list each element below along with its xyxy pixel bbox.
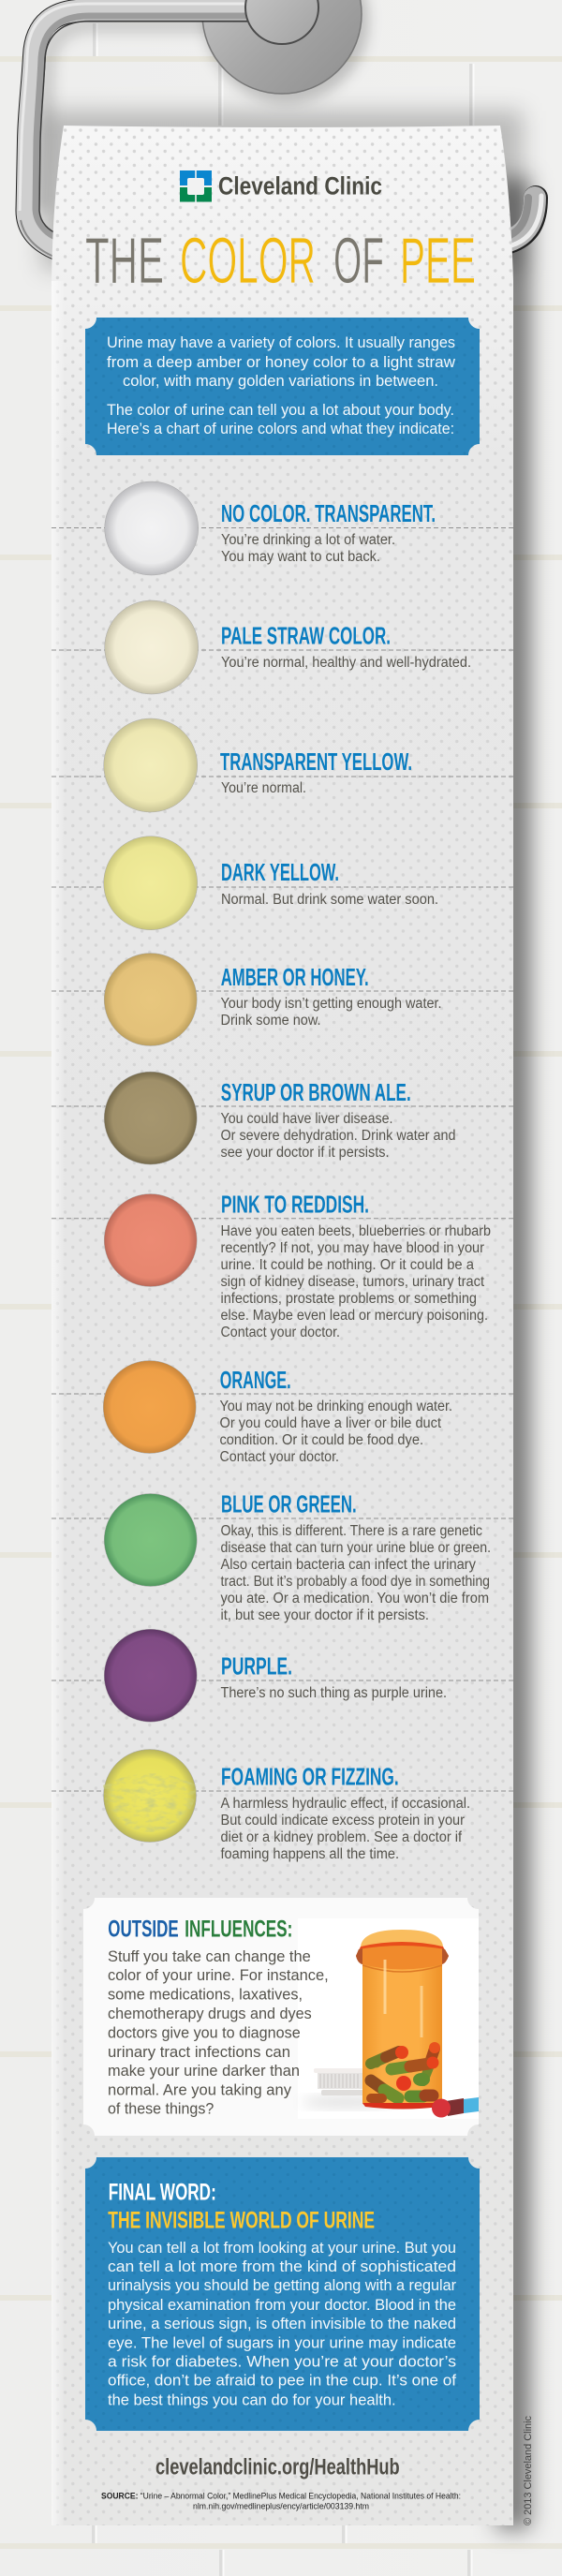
description: You could have liver disease. bbox=[221, 1111, 393, 1127]
swatch: purple bbox=[104, 1629, 197, 1722]
swatch: syrup bbox=[104, 1072, 197, 1164]
description bbox=[221, 1223, 491, 1340]
heading: FOAMING OR FIZZING. bbox=[221, 1762, 399, 1790]
swatch: foaming bbox=[103, 1750, 197, 1843]
row: no color bbox=[52, 481, 513, 575]
icon: logo cross bbox=[180, 170, 212, 202]
description: Your body isn’t getting enough water. bbox=[221, 996, 442, 1012]
body text: urinalysis you should be getting along with a regular bbox=[108, 2276, 456, 2294]
body text: urine, a serious sign, is often invisible to the naked bbox=[108, 2315, 456, 2332]
bracket bbox=[245, 0, 318, 44]
heading: PINK TO REDDISH. bbox=[221, 1191, 369, 1219]
bottle body bbox=[362, 1958, 442, 2106]
heading: PURPLE. bbox=[221, 1651, 292, 1680]
description: Have you eaten beets, blueberries or rhubarb bbox=[221, 1223, 491, 1239]
body text: normal. Are you taking any bbox=[108, 2081, 291, 2099]
heading: SYRUP OR BROWN ALE. bbox=[221, 1078, 411, 1106]
description: Also certain bacteria can infect the urinary bbox=[221, 1557, 476, 1573]
copyright: © 2013 Cleveland Clinic bbox=[523, 2416, 534, 2525]
pills in bottle bbox=[371, 2049, 435, 2098]
panel: outside influences bbox=[83, 1898, 479, 2136]
swatch: pale straw bbox=[105, 600, 199, 694]
row: blue or green bbox=[52, 1489, 513, 1623]
swatch: amber bbox=[104, 954, 197, 1045]
swatch: green bbox=[104, 1493, 197, 1587]
source bbox=[101, 2492, 461, 2512]
row: pale straw bbox=[52, 600, 513, 694]
body text: urinary tract infections can bbox=[108, 2043, 290, 2061]
description: Drink some now. bbox=[221, 1013, 320, 1029]
heading: INFLUENCES: bbox=[185, 1916, 292, 1942]
title: COLOR bbox=[180, 224, 316, 297]
body text: Stuff you take can change the bbox=[108, 1947, 311, 1965]
swatch: no color bbox=[105, 481, 199, 575]
heading: ORANGE. bbox=[220, 1366, 291, 1394]
row: dark yellow bbox=[52, 836, 513, 930]
wall plate bbox=[202, 0, 362, 94]
heading: DARK YELLOW. bbox=[221, 858, 339, 886]
body text: a risk for diabetes. When you’re at your doctor’s bbox=[108, 2353, 456, 2371]
bottle lid bbox=[314, 2068, 364, 2095]
intro text: Urine may have a variety of colors. It usually ranges bbox=[107, 333, 455, 351]
body text: color of your urine. For instance, bbox=[108, 1966, 329, 1984]
description: tract. But it’s probably a food dye in something bbox=[221, 1574, 490, 1590]
row: pink bbox=[52, 1191, 513, 1340]
subheading: THE INVISIBLE WORLD OF URINE bbox=[108, 2207, 375, 2233]
description: condition. Or it could be food dye. bbox=[219, 1432, 423, 1448]
row: amber bbox=[52, 954, 513, 1045]
swatch: orange bbox=[103, 1360, 196, 1454]
title: PEE bbox=[400, 224, 476, 297]
description: you ate. Or a medication. You won’t die from bbox=[221, 1591, 489, 1606]
description: Or severe dehydration. Drink water and bbox=[221, 1128, 455, 1144]
description: There’s no such thing as purple urine. bbox=[221, 1685, 447, 1701]
title bbox=[85, 224, 476, 297]
description: A harmless hydraulic effect, if occasional. bbox=[221, 1796, 470, 1812]
description: You’re normal. bbox=[221, 780, 306, 796]
body text bbox=[108, 2239, 456, 2409]
description: disease that can turn your urine blue or green. bbox=[221, 1540, 491, 1556]
description: You may want to cut back. bbox=[221, 549, 380, 565]
row: orange bbox=[52, 1360, 513, 1465]
description: diet or a kidney problem. See a doctor if bbox=[221, 1829, 463, 1845]
source: SOURCE: “Urine – Abnormal Color,” MedlinePlus Medical Encyclopedia, National Institutes of Health: bbox=[101, 2492, 461, 2502]
description: You’re normal, healthy and well-hydrated. bbox=[221, 655, 471, 671]
heading: NO COLOR. TRANSPARENT. bbox=[221, 499, 436, 527]
body text: can tell a lot more from the kind of sophisticated bbox=[108, 2258, 456, 2275]
swatch: dark yellow bbox=[104, 836, 198, 930]
heading: AMBER OR HONEY. bbox=[221, 963, 369, 991]
heading: TRANSPARENT YELLOW. bbox=[220, 748, 412, 776]
toilet paper holder bbox=[20, 0, 541, 259]
description bbox=[221, 996, 442, 1029]
panel: intro bbox=[85, 318, 480, 455]
description: else. Maybe even lead or mercury poisoning. bbox=[221, 1308, 488, 1324]
body text: office, don’t be afraid to pee in the cup. It’s one of bbox=[108, 2372, 456, 2390]
bottle cap bbox=[356, 1930, 449, 1972]
row: syrup bbox=[52, 1072, 513, 1164]
intro text bbox=[107, 333, 456, 437]
title: OF bbox=[333, 224, 384, 297]
intro text: color, with many golden variations in between. bbox=[123, 372, 438, 390]
description: Contact your doctor. bbox=[219, 1449, 339, 1465]
row: foaming bbox=[52, 1750, 513, 1862]
body text: doctors give you to diagnose bbox=[108, 2024, 301, 2042]
loose capsule bbox=[432, 2097, 479, 2117]
intro text: Here’s a chart of urine colors and what they indicate: bbox=[107, 420, 454, 437]
toilet paper sheet bbox=[52, 126, 513, 2525]
description: sign of kidney disease, tumors, urinary tract bbox=[221, 1274, 485, 1290]
description bbox=[219, 1399, 452, 1465]
description: You’re drinking a lot of water. bbox=[221, 532, 395, 548]
description: But could indicate excess protein in your bbox=[221, 1813, 465, 1828]
description bbox=[221, 1111, 455, 1161]
swatch: pink bbox=[104, 1193, 197, 1287]
description: foaming happens all the time. bbox=[221, 1846, 399, 1862]
source: nlm.nih.gov/medlineplus/ency/article/003139.htm bbox=[193, 2502, 369, 2512]
body text: make your urine darker than bbox=[108, 2062, 300, 2080]
body text: of these things? bbox=[108, 2100, 214, 2118]
hook bbox=[506, 196, 541, 245]
heading: final word: FINAL WORD: bbox=[109, 2179, 216, 2205]
body text: physical examination from your doctor. Blood in the bbox=[108, 2296, 456, 2314]
row: transparent yellow bbox=[52, 718, 513, 812]
towel bar bbox=[20, 4, 248, 259]
panel: final word bbox=[85, 2157, 480, 2431]
description bbox=[221, 1796, 470, 1862]
image: pill bottle bbox=[302, 1930, 479, 2117]
url: clevelandclinic.org/HealthHub bbox=[155, 2455, 400, 2480]
body text: eye. The level of sugars in your urine may indicate bbox=[108, 2334, 456, 2352]
description bbox=[221, 532, 395, 565]
body text: the best things you can do for your health. bbox=[108, 2391, 396, 2409]
body text bbox=[108, 1947, 329, 2118]
description: Or you could have a liver or bile duct bbox=[219, 1415, 442, 1431]
intro text: from a deep amber or honey color to a light straw bbox=[107, 353, 456, 371]
description: urine. It could be nothing. Or it could be a bbox=[221, 1257, 474, 1273]
body text: chemotherapy drugs and dyes bbox=[108, 2005, 312, 2022]
description: Okay, this is different. There is a rare genetic bbox=[221, 1523, 482, 1539]
heading bbox=[108, 1916, 292, 1942]
logo: Cleveland Clinic bbox=[180, 170, 382, 202]
body text: some medications, laxatives, bbox=[108, 1986, 303, 2004]
description: Normal. But drink some water soon. bbox=[221, 892, 438, 908]
description: see your doctor if it persists. bbox=[221, 1145, 390, 1161]
logo wordmark: Cleveland Clinic bbox=[218, 172, 382, 200]
description: Contact your doctor. bbox=[221, 1325, 340, 1340]
body text: You can tell a lot from looking at your urine. But you bbox=[108, 2239, 456, 2257]
heading: PALE STRAW COLOR. bbox=[221, 622, 391, 650]
description: infections, prostate problems or something bbox=[221, 1291, 477, 1307]
row: purple bbox=[52, 1629, 513, 1722]
description: You may not be drinking enough water. bbox=[219, 1399, 452, 1414]
description: it, but see your doctor if it persists. bbox=[221, 1607, 429, 1623]
heading: OUTSIDE bbox=[108, 1916, 179, 1942]
intro text: The color of urine can tell you a lot about your body. bbox=[107, 401, 454, 419]
description: recently? If not, you may have blood in your bbox=[221, 1240, 484, 1256]
title: THE bbox=[85, 224, 164, 297]
heading: BLUE OR GREEN. bbox=[221, 1489, 357, 1517]
description bbox=[221, 1523, 491, 1623]
swatch: transparent yellow bbox=[104, 718, 198, 812]
